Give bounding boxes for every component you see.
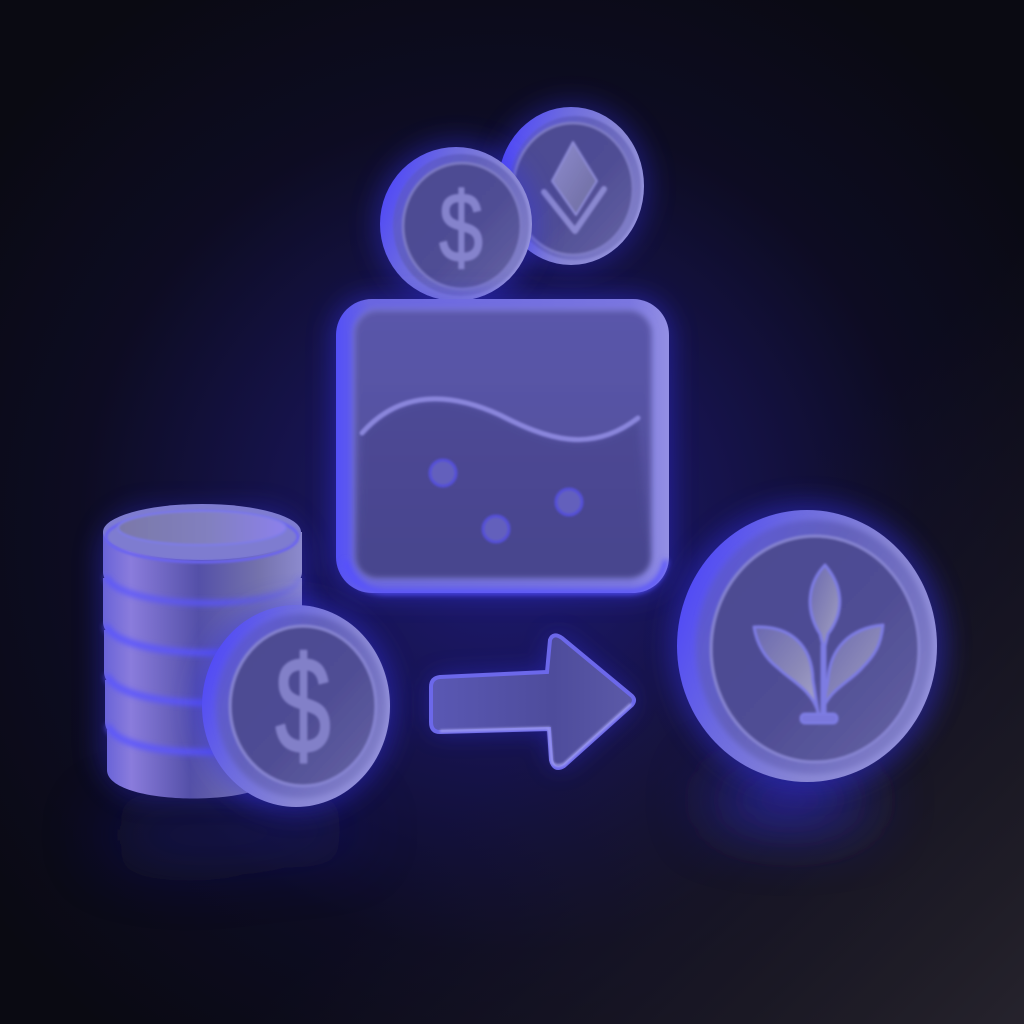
bubble [483, 516, 509, 542]
bubble [430, 460, 456, 486]
arrow [431, 635, 634, 768]
lower fill of the pool [360, 403, 648, 575]
disc 1 [103, 504, 302, 604]
stack of coins [98, 504, 308, 798]
disc 3 [104, 630, 296, 704]
wave line [362, 399, 638, 440]
coin: plant yield [670, 502, 946, 790]
icon: dollar sign: $ [275, 628, 331, 783]
icon: dollar sign: $ [439, 172, 483, 282]
bubble [556, 489, 582, 515]
disc 2 [103, 578, 302, 654]
coin: ethereum [494, 102, 650, 270]
disc 4 [105, 680, 290, 754]
icon: sprout [754, 565, 883, 723]
coin: dollar small [375, 141, 539, 307]
disc 5 [107, 730, 280, 798]
coin: dollar large [196, 600, 396, 812]
floor reflections [100, 778, 870, 861]
icon: ethereum diamond [544, 142, 604, 231]
panel: liquidity pool [332, 296, 672, 596]
